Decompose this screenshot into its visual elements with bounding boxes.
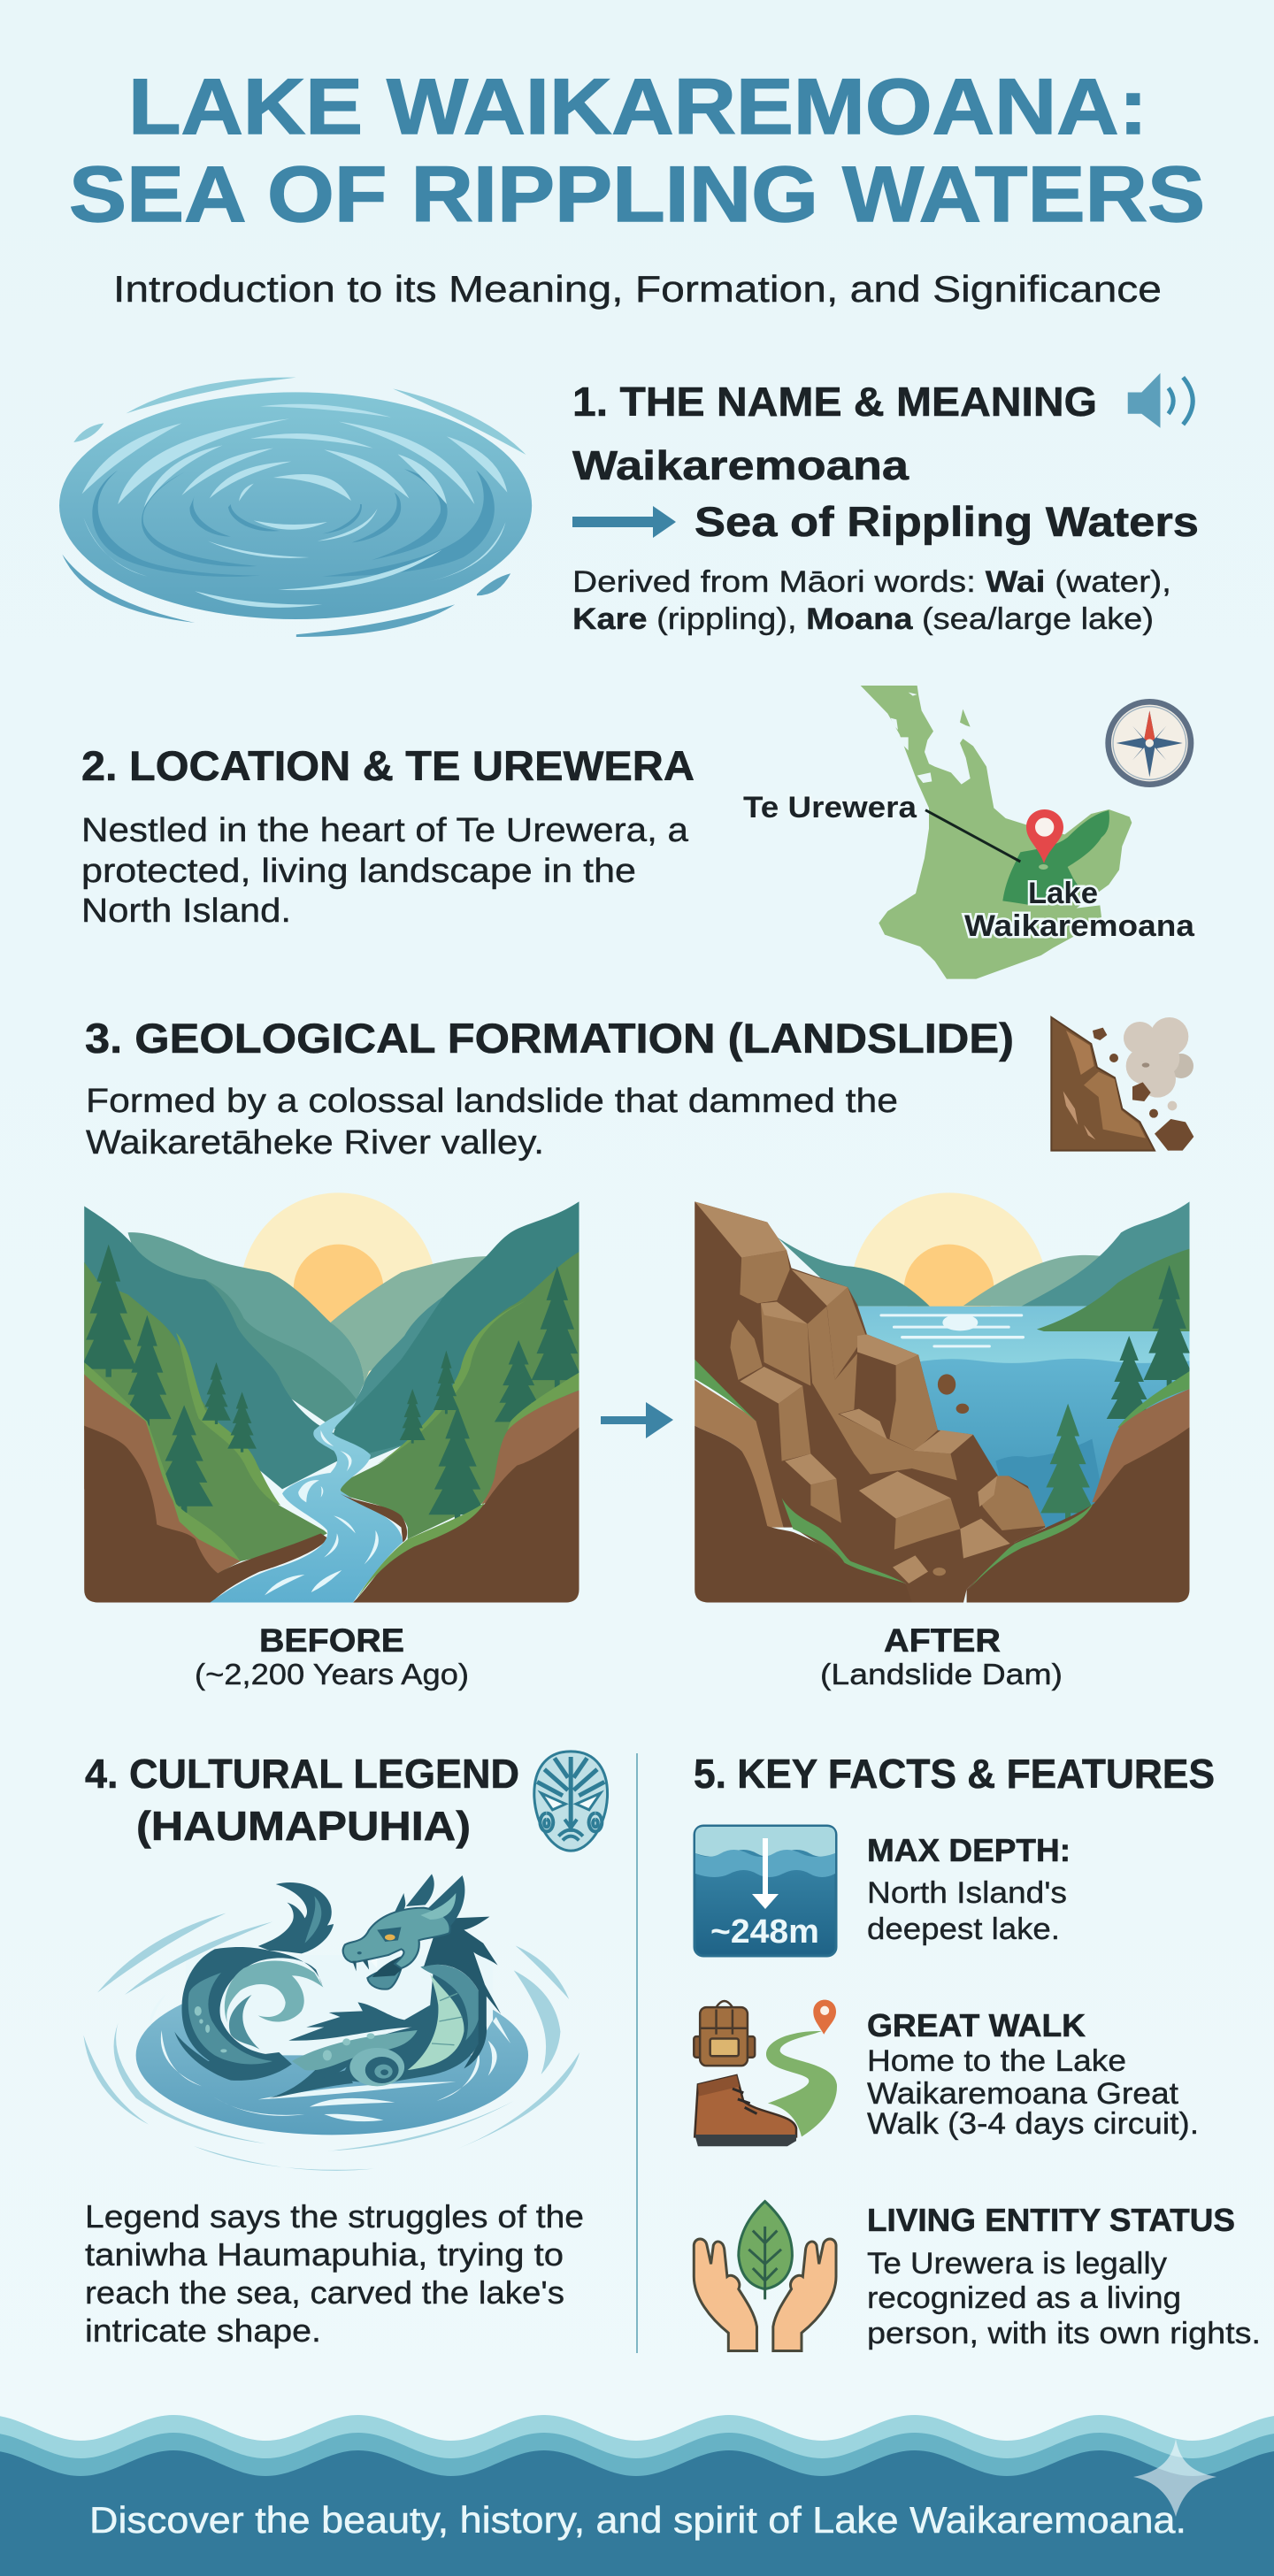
panel: name and meaning xyxy=(59,373,1199,637)
text: legend description: Legend says the struggles of the xyxy=(85,2198,584,2235)
icon: landslide xyxy=(1051,1017,1193,1151)
icon: max depth gauge xyxy=(695,1826,836,1956)
title xyxy=(69,62,1205,238)
icon: Māori carved mask xyxy=(534,1752,608,1851)
text: living entity status: recognized as a living xyxy=(867,2281,1181,2315)
clear area above water xyxy=(186,1955,493,2055)
footer banner xyxy=(0,2415,1274,2576)
backpack xyxy=(694,2001,755,2066)
lower fin xyxy=(271,2070,353,2098)
heading: key facts: 5. KEY FACTS & FEATURES xyxy=(694,1751,1215,1797)
text: location description xyxy=(81,812,689,930)
text: max depth xyxy=(867,1832,1071,1946)
panel: geological formation xyxy=(81,1015,1195,1690)
title: SEA OF RIPPLING WATERS xyxy=(69,150,1205,238)
text: formation description: Formed by a colossal landslide that dammed the xyxy=(86,1083,898,1120)
water streaks xyxy=(150,1993,510,2121)
map labels: Waikaremoana xyxy=(964,909,1195,943)
caption: before: (~2,200 Years Ago) xyxy=(195,1658,469,1690)
landslide rock mass xyxy=(695,1201,1046,1603)
teeth xyxy=(352,1959,369,1971)
heading: cultural legend xyxy=(85,1751,519,1849)
heading: geological formation: 3. GEOLOGICAL FORMATION (LANDSLIDE) xyxy=(85,1015,1014,1062)
text: derivation: Derived from Māori words: Wai (water), xyxy=(572,565,1171,599)
waves xyxy=(0,2415,1274,2576)
horns xyxy=(393,1874,464,1927)
dragon coil xyxy=(182,1947,322,2070)
illustration: taniwha Haumapuhia in swirling water xyxy=(83,1874,579,2171)
text: living entity status: LIVING ENTITY STATUS xyxy=(867,2202,1235,2238)
text: formation description: Waikaretāheke River valley. xyxy=(86,1124,544,1162)
caption: before xyxy=(195,1622,469,1690)
text: max depth: MAX DEPTH: xyxy=(867,1832,1071,1868)
eye xyxy=(385,1935,395,1940)
water pool xyxy=(136,1975,528,2135)
outer ripples xyxy=(83,1913,579,2171)
title: LAKE WAIKAREMOANA: xyxy=(128,62,1147,150)
map: North Island xyxy=(743,686,1195,979)
icon: map pin xyxy=(1026,809,1063,863)
panel: key facts and features xyxy=(694,1751,1261,2350)
text: Waikaremoana: Waikaremoana xyxy=(572,442,909,488)
map labels: Lake xyxy=(1028,877,1098,910)
spiral wave xyxy=(349,2048,404,2086)
arrow: before to after xyxy=(601,1402,673,1438)
head xyxy=(343,1908,450,1968)
text: great walk: GREAT WALK xyxy=(867,2007,1086,2043)
text: location description: Nestled in the heart of Te Urewera, a xyxy=(81,812,689,849)
text: great walk xyxy=(867,2007,1199,2141)
text: derivation xyxy=(572,565,1171,636)
text: sea of rippling waters: Sea of Rippling Waters xyxy=(695,498,1199,545)
icon: hands holding leaf xyxy=(694,2202,836,2350)
pin xyxy=(813,2000,836,2035)
text: great walk: Walk (3-4 days circuit). xyxy=(867,2107,1199,2141)
text: max depth: North Island's xyxy=(867,1876,1067,1910)
text: legend description xyxy=(85,2198,584,2349)
text: max depth: deepest lake. xyxy=(867,1913,1060,1946)
heading: cultural legend: 4. CULTURAL LEGEND xyxy=(85,1751,519,1797)
callout line xyxy=(925,810,1020,862)
caption: after: AFTER xyxy=(884,1622,1001,1659)
neck xyxy=(420,1965,480,2041)
icon: sparkle xyxy=(1133,2439,1216,2517)
text: living entity status: person, with its own rights. xyxy=(867,2317,1261,2350)
text: derivation: Kare (rippling), Moana (sea/large lake) xyxy=(572,602,1154,636)
icon: compass xyxy=(1109,702,1191,785)
text: legend description: reach the sea, carved the lake's xyxy=(85,2274,564,2311)
belly xyxy=(408,1974,464,2070)
panel: location and Te Urewera xyxy=(81,686,1195,979)
text: living entity status: Te Urewera is legally xyxy=(867,2247,1167,2281)
icon: rippling water xyxy=(59,378,532,637)
panel: cultural legend xyxy=(83,1751,608,2349)
text: legend description: taniwha Haumapuhia, trying to xyxy=(85,2236,564,2273)
illustration: before, river valley xyxy=(81,1192,583,1603)
trail xyxy=(766,2031,837,2136)
lower jaw xyxy=(367,1966,403,1990)
subtitle: Introduction to its Meaning, Formation, and Significance xyxy=(113,268,1162,310)
dragon tail fin xyxy=(174,1882,334,2081)
footer text: Discover the beauty, history, and spirit of Lake Waikaremoana. xyxy=(89,2499,1186,2541)
arrow: meaning xyxy=(572,506,676,538)
text: great walk: Waikaremoana Great xyxy=(867,2077,1179,2111)
icon: great walk hiking gear xyxy=(694,2000,837,2146)
dragon body xyxy=(269,1970,483,2098)
icon: max depth gauge: ~248m xyxy=(710,1913,819,1951)
map labels: Te Urewera xyxy=(743,791,917,824)
heading: location: 2. LOCATION & TE UREWERA xyxy=(81,742,695,789)
map labels xyxy=(743,791,1195,943)
caption: after xyxy=(820,1622,1063,1690)
text: great walk: Home to the Lake xyxy=(867,2044,1126,2078)
illustration: after, landslide dam and lake xyxy=(695,1192,1195,1603)
text: living entity status xyxy=(867,2202,1261,2350)
text: location description: protected, living landscape in the xyxy=(81,853,636,890)
text: legend description: intricate shape. xyxy=(85,2312,321,2349)
boot xyxy=(695,2075,796,2136)
text: location description: North Island. xyxy=(81,893,291,930)
caption: before: BEFORE xyxy=(259,1622,404,1659)
caption: after: (Landslide Dam) xyxy=(820,1658,1063,1690)
dorsal fin xyxy=(288,2002,430,2041)
icon: speaker xyxy=(1128,373,1193,428)
heading: the name and meaning: 1. THE NAME & MEANING xyxy=(572,379,1097,425)
text: formation description xyxy=(86,1083,898,1162)
heading: cultural legend: (HAUMAPUHIA) xyxy=(136,1803,471,1849)
mane xyxy=(424,1917,501,2068)
